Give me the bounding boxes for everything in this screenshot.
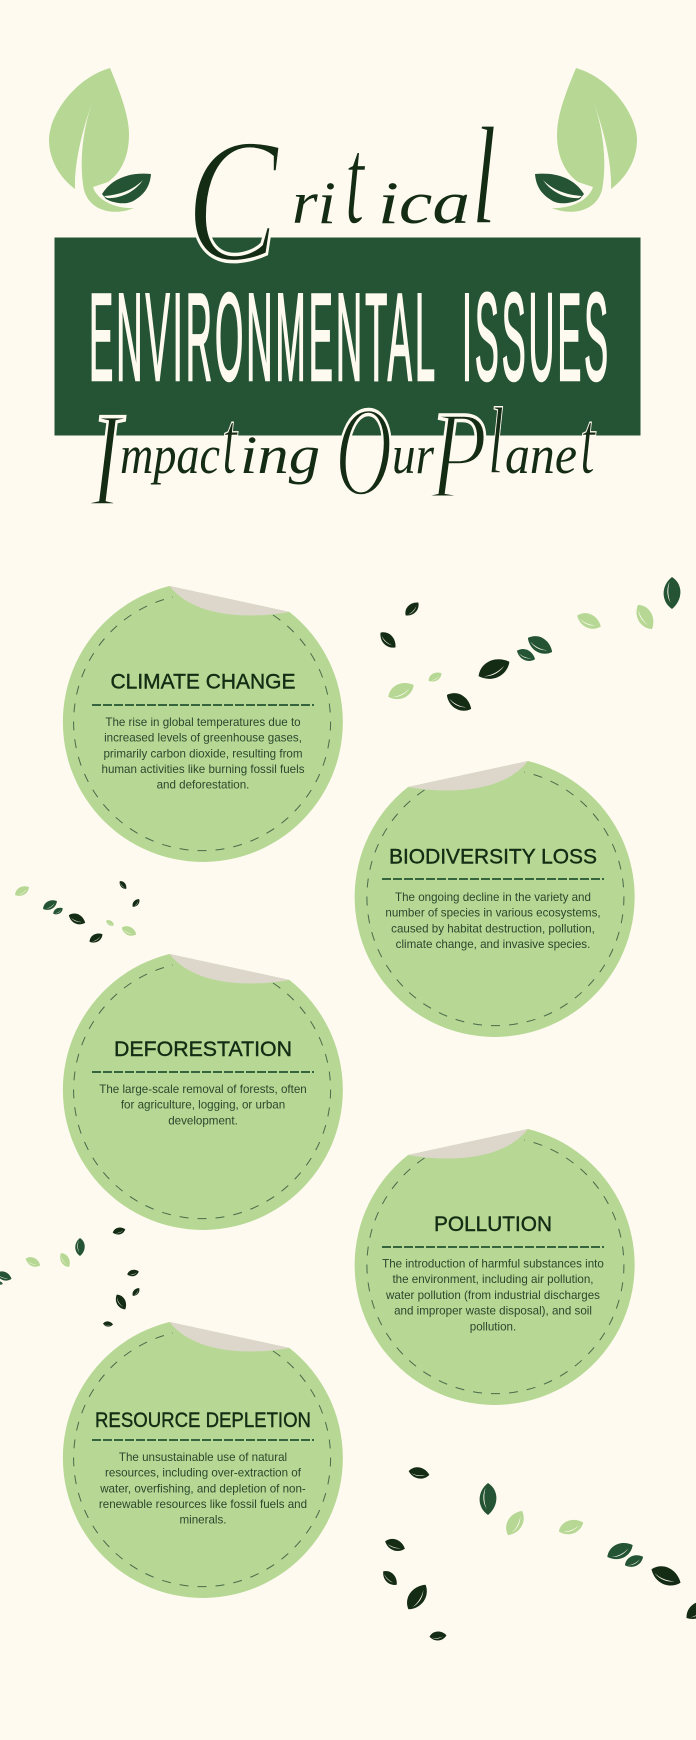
subtitle: Impacting Our Planet [89, 382, 597, 535]
divider [382, 1246, 604, 1248]
text: resource depletion description: minerals. [179, 1514, 227, 1527]
panel: climate change [63, 586, 343, 862]
heading: climate change: CLIMATE CHANGE [110, 670, 296, 694]
divider [382, 878, 604, 880]
title banner [54, 238, 640, 436]
subtitle: Impacting Our Planet: mpac [120, 425, 220, 485]
text: resource depletion description: water, overfishing, and depletion of non- [99, 1482, 306, 1495]
title: Critical: l [472, 99, 496, 254]
text: biodiversity loss description: climate change, and invasive species. [396, 938, 590, 951]
text: pollution description: and improper waste disposal), and soil [394, 1305, 592, 1318]
heading: pollution: POLLUTION [434, 1213, 552, 1236]
icon: falling leaves middle left [13, 879, 141, 945]
text: climate change description: and deforestation. [157, 779, 249, 792]
text: resource depletion description: resources, including over-extraction of [105, 1467, 302, 1480]
text: pollution description: the environment, including air pollution, [392, 1273, 594, 1286]
subtitle: Impacting Our Planet: t [222, 394, 239, 494]
text: biodiversity loss description: The ongoing decline in the variety and [395, 891, 591, 904]
title: Critical: ri [292, 170, 336, 236]
icon: falling leaves lower left [0, 1226, 141, 1327]
subtitle: Impacting Our Planet: I [89, 386, 126, 535]
text: climate change description: human activities like burning fossil fuels [102, 763, 305, 776]
icon: falling leaves bottom right [380, 1466, 696, 1641]
title: Critical [186, 99, 496, 299]
text: resource depletion description: The unsustainable use of natural [119, 1451, 287, 1464]
text: biodiversity loss description: caused by habitat destruction, pollution, [391, 922, 595, 935]
text: climate change description: The rise in global temperatures due to [105, 716, 301, 729]
subtitle: Impacting Our Planet: ing [240, 425, 320, 485]
panel: biodiversity loss [355, 761, 635, 1037]
title: Critical: ica [378, 170, 470, 236]
text: climate change description: increased levels of greenhouse gases, [104, 732, 302, 745]
icon: falling leaves top right [377, 577, 680, 715]
panel: resource depletion [63, 1322, 343, 1598]
text: deforestation description: development. [168, 1114, 238, 1127]
text: pollution description: The introduction of harmful substances into [382, 1258, 604, 1270]
subtitle: Impacting Our Planet: t [580, 394, 597, 494]
subtitle: Impacting Our Planet: ur [392, 425, 435, 485]
panel: deforestation [63, 954, 343, 1230]
divider [92, 704, 314, 706]
subtitle: Impacting Our Planet: P [429, 386, 487, 524]
subtitle: Impacting Our Planet: l [488, 388, 504, 494]
title: Critical: C [186, 102, 280, 299]
subtitle: Impacting Our Planet: ane [505, 425, 577, 485]
heading: resource depletion: RESOURCE DEPLETION [95, 1409, 311, 1432]
icon: left leaf emblem [49, 68, 151, 212]
heading: deforestation: DEFORESTATION [114, 1038, 292, 1061]
text: pollution description: pollution. [470, 1320, 516, 1333]
divider [92, 1071, 314, 1073]
icon: right leaf emblem [535, 68, 637, 212]
text: climate change description: primarily carbon dioxide, resulting from [103, 747, 303, 760]
text: resource depletion description: renewable resources like fossil fuels and [99, 1498, 307, 1511]
divider [92, 1439, 314, 1441]
title: Critical: t [345, 111, 366, 250]
text: biodiversity loss description: number of species in various ecosystems, [385, 907, 601, 920]
text: deforestation description: for agriculture, logging, or urban [121, 1099, 285, 1112]
text: deforestation description: The large-scale removal of forests, often [99, 1083, 307, 1096]
text: pollution description: water pollution (from industrial discharges [385, 1289, 600, 1302]
panel: pollution [355, 1129, 635, 1405]
heading: biodiversity loss: BIODIVERSITY LOSS [389, 846, 597, 868]
subtitle: Impacting Our Planet: O [335, 382, 392, 524]
